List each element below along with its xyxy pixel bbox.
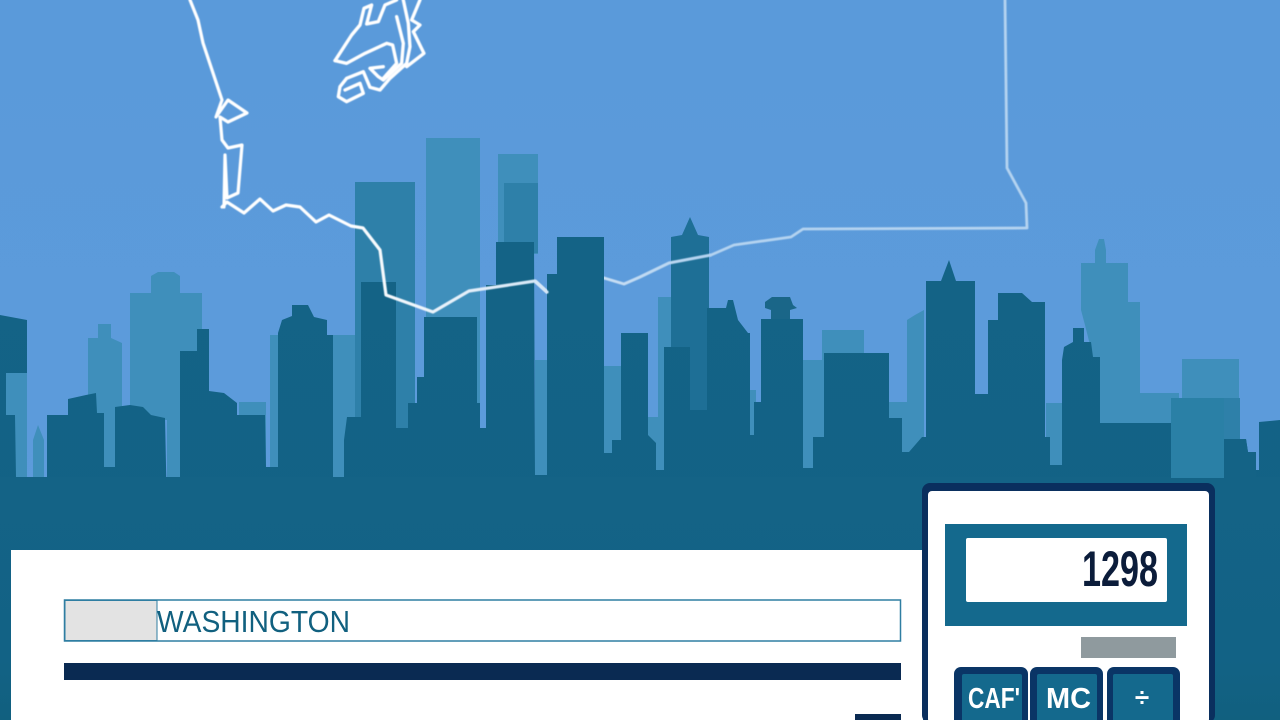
button: divide [1107, 667, 1180, 720]
state outline: Washington border [190, 0, 1027, 312]
button: MC [1030, 667, 1103, 720]
button: divide: ÷ [1135, 682, 1149, 712]
state outline: Washington border, behind front towers [535, 255, 711, 292]
button: MC: MC [1046, 683, 1091, 715]
field text: WASHINGTON [157, 604, 350, 639]
tower with spire, darker tint [671, 217, 709, 410]
back skyline: pale buildings [6, 138, 1239, 513]
button: CAF: CAF' [968, 683, 1020, 715]
west coast line [190, 0, 247, 207]
form field: state name [64, 600, 900, 641]
base rectangle [0, 477, 1280, 720]
dark bar [64, 663, 901, 680]
front skyline silhouette [0, 237, 1280, 720]
calculator display [945, 524, 1187, 626]
back skyline: mid-tone buildings [355, 182, 1240, 478]
small dark block [855, 714, 901, 720]
display number: 1298 [1082, 541, 1158, 597]
block overlap, lower right [1224, 439, 1256, 478]
grey strip [1081, 637, 1176, 658]
panel: white form [11, 550, 923, 720]
hat-shaped rooftop [765, 297, 797, 319]
mid-tone block, lower right [1171, 398, 1224, 478]
calculator [922, 483, 1215, 720]
button: CAF [954, 667, 1028, 720]
Puget Sound islands [335, 0, 424, 102]
eastern border [711, 0, 1027, 255]
southern border river [222, 199, 547, 312]
